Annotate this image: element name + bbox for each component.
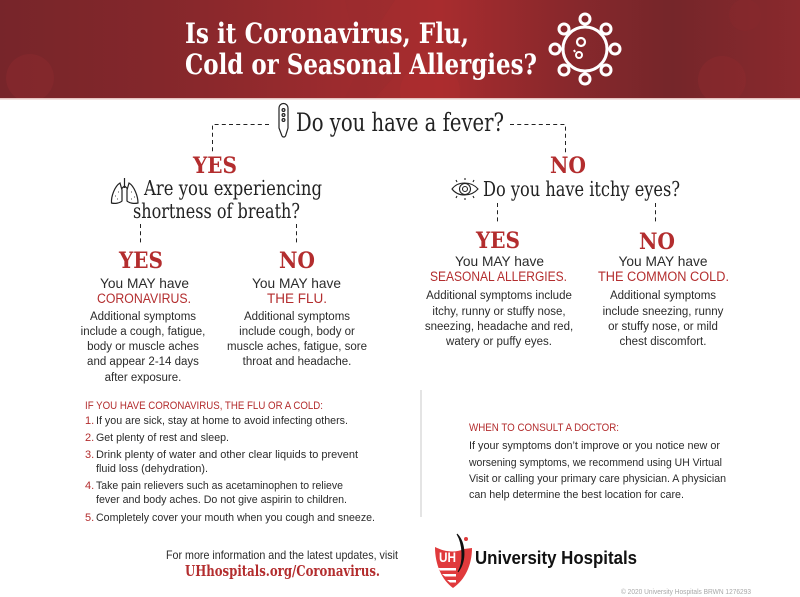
panel: when to consult a doctor: can help determine the best location for care. [469, 489, 684, 501]
question: itchy eyes: Do you have itchy eyes? [483, 177, 680, 201]
icon: eye [452, 178, 478, 200]
panel: the flu: throat and headache. [243, 356, 351, 368]
arrow: fever to no [510, 124, 566, 153]
arrow: breath yes [140, 224, 142, 245]
header banner [0, 0, 800, 100]
answer: fever no: NO [550, 153, 586, 179]
title: Cold or Seasonal Allergies? [185, 48, 537, 81]
logo: University Hospitals [435, 534, 637, 588]
panel: coronavirus: YES [118, 248, 163, 274]
list items: Take pain relievers such as acetaminophen to relieve [96, 480, 343, 492]
list items [96, 415, 375, 524]
icon: virus [550, 14, 620, 84]
arrow: eyes no [654, 203, 656, 224]
arrow: fever to yes [212, 124, 269, 153]
list numbers [85, 415, 94, 524]
panel: common cold: Additional symptoms [610, 290, 716, 302]
arrow: eyes yes [496, 203, 498, 224]
panel: common cold: or stuffy nose, or mild [608, 321, 718, 333]
list numbers: 2. [85, 432, 94, 444]
panel: coronavirus: Additional symptoms [90, 311, 196, 323]
list numbers: 1. [85, 415, 94, 427]
copyright: © 2020 University Hospitals BRWN 1276293 [621, 587, 751, 596]
panel: the flu: include cough, body or [239, 326, 355, 338]
question: shortness of breath [133, 176, 322, 223]
panel: the flu: THE FLU. [267, 291, 327, 306]
list items: fever and body aches. Do not give aspirin to children. [96, 494, 347, 506]
answer: fever yes: YES [192, 153, 237, 179]
panel: seasonal allergies: SEASONAL ALLERGIES. [430, 269, 567, 284]
footer: more information [166, 548, 399, 580]
list heading: IF YOU HAVE CORONAVIRUS, THE FLU OR A COLD: [85, 400, 323, 412]
panel: coronavirus: include a cough, fatigue, [81, 326, 205, 338]
panel: common cold: include sneezing, runny [603, 306, 724, 318]
logo: University Hospitals: UH [439, 549, 456, 565]
panel: the flu: NO [279, 248, 315, 274]
panel: when to consult a doctor: WHEN TO CONSULT A DOCTOR: [469, 422, 619, 434]
panel: seasonal allergies: watery or puffy eyes. [445, 336, 552, 348]
question: shortness of breath: Are you experiencing [143, 176, 322, 200]
list numbers: 4. [85, 480, 94, 492]
list items: Completely cover your mouth when you cough and sneeze. [96, 512, 375, 524]
panel: coronavirus: after exposure. [105, 372, 181, 384]
title: Is it Coronavirus, Flu, [185, 17, 469, 50]
panel: when to consult a doctor: worsening symptoms, we recommend using UH Virtual [468, 457, 722, 469]
title [185, 17, 537, 81]
footer: more information: UHhospitals.org/Coronavirus. [185, 562, 380, 580]
arrow: breath no [296, 224, 298, 245]
panel: seasonal allergies: YES [475, 228, 520, 254]
panel: common cold: You MAY have [618, 253, 708, 269]
panel: seasonal allergies: Additional symptoms include [426, 290, 572, 302]
list items: Drink plenty of water and other clear liquids to prevent [96, 449, 358, 461]
panel: the flu: You MAY have [252, 275, 341, 291]
panel: the flu: muscle aches, fatigue, sore [227, 341, 367, 353]
panel: seasonal allergies: itchy, runny or stuffy nose, [432, 306, 566, 318]
panel: common cold: chest discomfort. [620, 336, 706, 348]
list items: If you are sick, stay at home to avoid infecting others. [96, 415, 348, 427]
icon: thermometer [279, 104, 288, 137]
panel: seasonal allergies [425, 228, 573, 348]
panel: seasonal allergies: sneezing, headache and red, [425, 321, 573, 333]
list items: fluid loss (dehydration). [96, 463, 208, 475]
panel: coronavirus: body or muscle aches [87, 341, 199, 353]
panel: coronavirus: CORONAVIRUS. [97, 291, 191, 306]
panel: the flu: Additional symptoms [244, 311, 350, 323]
panel: common cold: THE COMMON COLD. [598, 269, 729, 284]
list numbers: 3. [85, 449, 94, 461]
panel: when to consult a doctor: Visit or calling your primary care physician. A physician [469, 473, 726, 485]
panel: when to consult a doctor: If your symptoms don’t improve or you notice new or [469, 440, 720, 452]
icon: lungs [111, 178, 138, 203]
panel: self-care list [85, 400, 375, 524]
panel: coronavirus [81, 248, 205, 384]
panel: coronavirus: and appear 2-14 days [87, 356, 199, 368]
panel: common cold: NO [639, 229, 675, 255]
panel: the flu [227, 248, 367, 368]
panel: seasonal allergies: You MAY have [455, 253, 544, 269]
panel: coronavirus: You MAY have [100, 275, 189, 291]
logo: University Hospitals: University Hospitals [475, 548, 637, 568]
question: fever: Do you have a fever? [296, 108, 504, 137]
panel: when to consult a doctor [468, 422, 726, 501]
panel: common cold [598, 229, 729, 348]
question: shortness of breath: shortness of breath? [133, 199, 300, 223]
list numbers: 5. [85, 512, 94, 524]
footer: more information: For more information and the latest updates, visit [166, 548, 399, 562]
list items: Get plenty of rest and sleep. [96, 432, 229, 444]
